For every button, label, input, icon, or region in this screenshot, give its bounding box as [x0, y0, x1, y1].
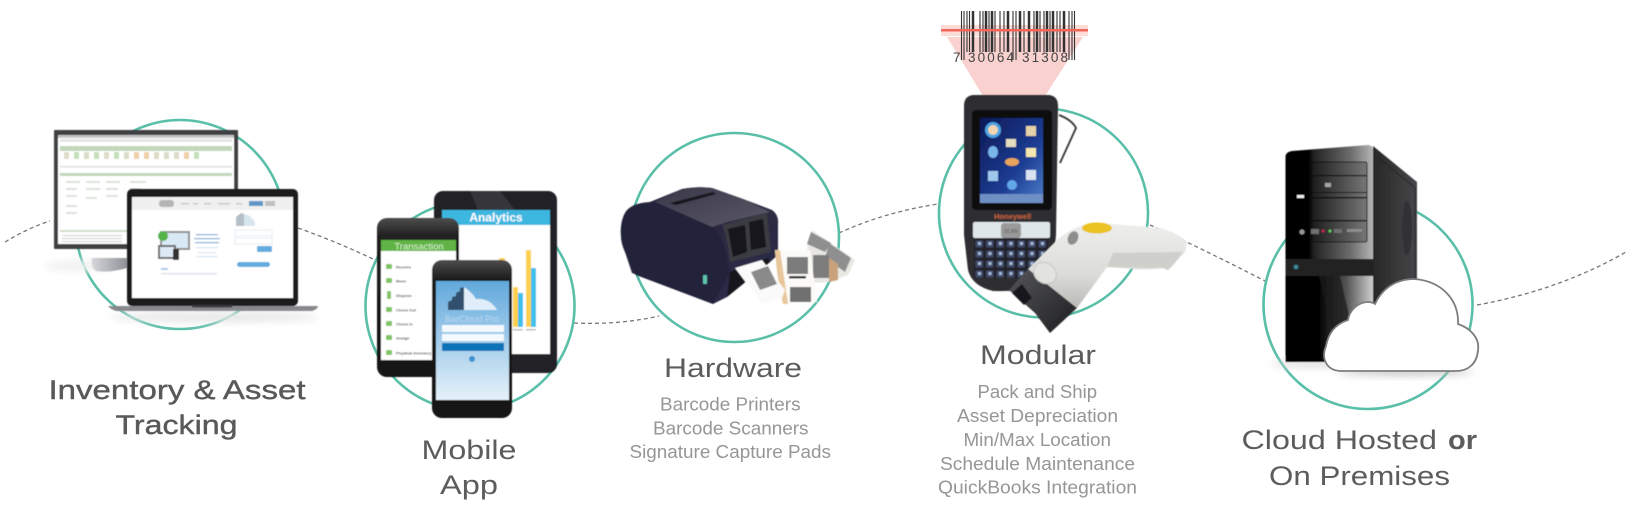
transaction menu rows: Dispose: [396, 293, 412, 298]
icon: monitor: [44, 130, 238, 272]
icon: barcode: [953, 11, 1074, 65]
heading: inventory and asset tracking: Inventory & Asset: [48, 375, 306, 405]
heading: cloud hosted or on premises: [1242, 425, 1478, 491]
panel: hardware printer and labels: [621, 187, 855, 304]
panel: cloud hosted tower and cloud: [1270, 145, 1478, 375]
heading: cloud hosted or on premises: Cloud Hosted: [1242, 425, 1437, 455]
icon: left phone transaction screen: [377, 218, 459, 377]
heading: inventory and asset tracking: [48, 375, 306, 440]
heading: mobile app: App: [440, 470, 498, 500]
list: modular items: Pack and Ship: [978, 382, 1097, 402]
list: hardware items: Signature Capture Pads: [630, 442, 831, 462]
bar chart: [499, 250, 536, 330]
red scan line: [941, 29, 1088, 32]
label: scan key: SCAN: [1004, 229, 1018, 235]
label: app name: BarCloud Pro: [445, 314, 499, 324]
icon: cloud: [1324, 279, 1478, 375]
icon: barcode: 30064 31308: [968, 50, 1068, 65]
icon: front phone login screen: [432, 260, 512, 418]
heading: mobile app: Mobile: [422, 435, 516, 465]
barcode digits: 7: [953, 50, 961, 65]
teal circles: [76, 108, 1472, 410]
icon: handheld computer: [964, 95, 1076, 291]
icon: barcode printer: [621, 187, 778, 304]
transaction menu rows: Physical Inventory: [396, 350, 432, 356]
label: device brand: Honeywell: [994, 212, 1031, 221]
transaction menu rows: [386, 264, 432, 356]
panel: mobile app devices: [377, 191, 557, 418]
list: hardware items: [630, 394, 831, 462]
list: modular items: QuickBooks Integration: [938, 478, 1137, 498]
list: modular items: Asset Depreciation: [957, 406, 1118, 426]
transaction menu rows: Assign: [396, 336, 410, 340]
list: modular items: Min/Max Location: [964, 430, 1111, 450]
panel: modular scanner devices: [941, 11, 1187, 333]
list: modular items: Schedule Maintenance: [940, 454, 1135, 474]
transaction menu rows: Move: [396, 278, 407, 284]
transaction menu rows: Check In: [396, 322, 413, 326]
icon: tablet with analytics: [434, 191, 557, 373]
heading: cloud hosted or on premises: On Premises: [1269, 461, 1450, 491]
heading: hardware: Hardware: [664, 353, 802, 383]
list: modular items: [938, 382, 1137, 498]
list: hardware items: Barcode Printers: [660, 394, 800, 414]
label: analytics header: Analytics: [469, 210, 523, 224]
icon: handheld barcode scanner gun: [1009, 222, 1187, 333]
heading: modular: Modular: [980, 340, 1096, 370]
icon: laptop: [108, 189, 320, 322]
icon: computer tower: [1270, 145, 1417, 367]
transaction menu rows: Receive: [396, 264, 412, 270]
icon: scan beam: [941, 25, 1088, 96]
list: hardware items: Barcode Scanners: [653, 418, 808, 438]
dashed connector path: [5, 204, 1626, 323]
label: transaction header: Transaction: [394, 242, 444, 252]
panel: inventory and asset tracking devices: [44, 130, 320, 322]
icon: printed barcode labels: [735, 230, 855, 304]
transaction menu rows: Check Out: [396, 308, 417, 312]
heading: mobile app: [422, 435, 516, 500]
heading: cloud hosted or on premises: or: [1448, 425, 1478, 455]
heading: inventory and asset tracking: Tracking: [116, 410, 238, 440]
